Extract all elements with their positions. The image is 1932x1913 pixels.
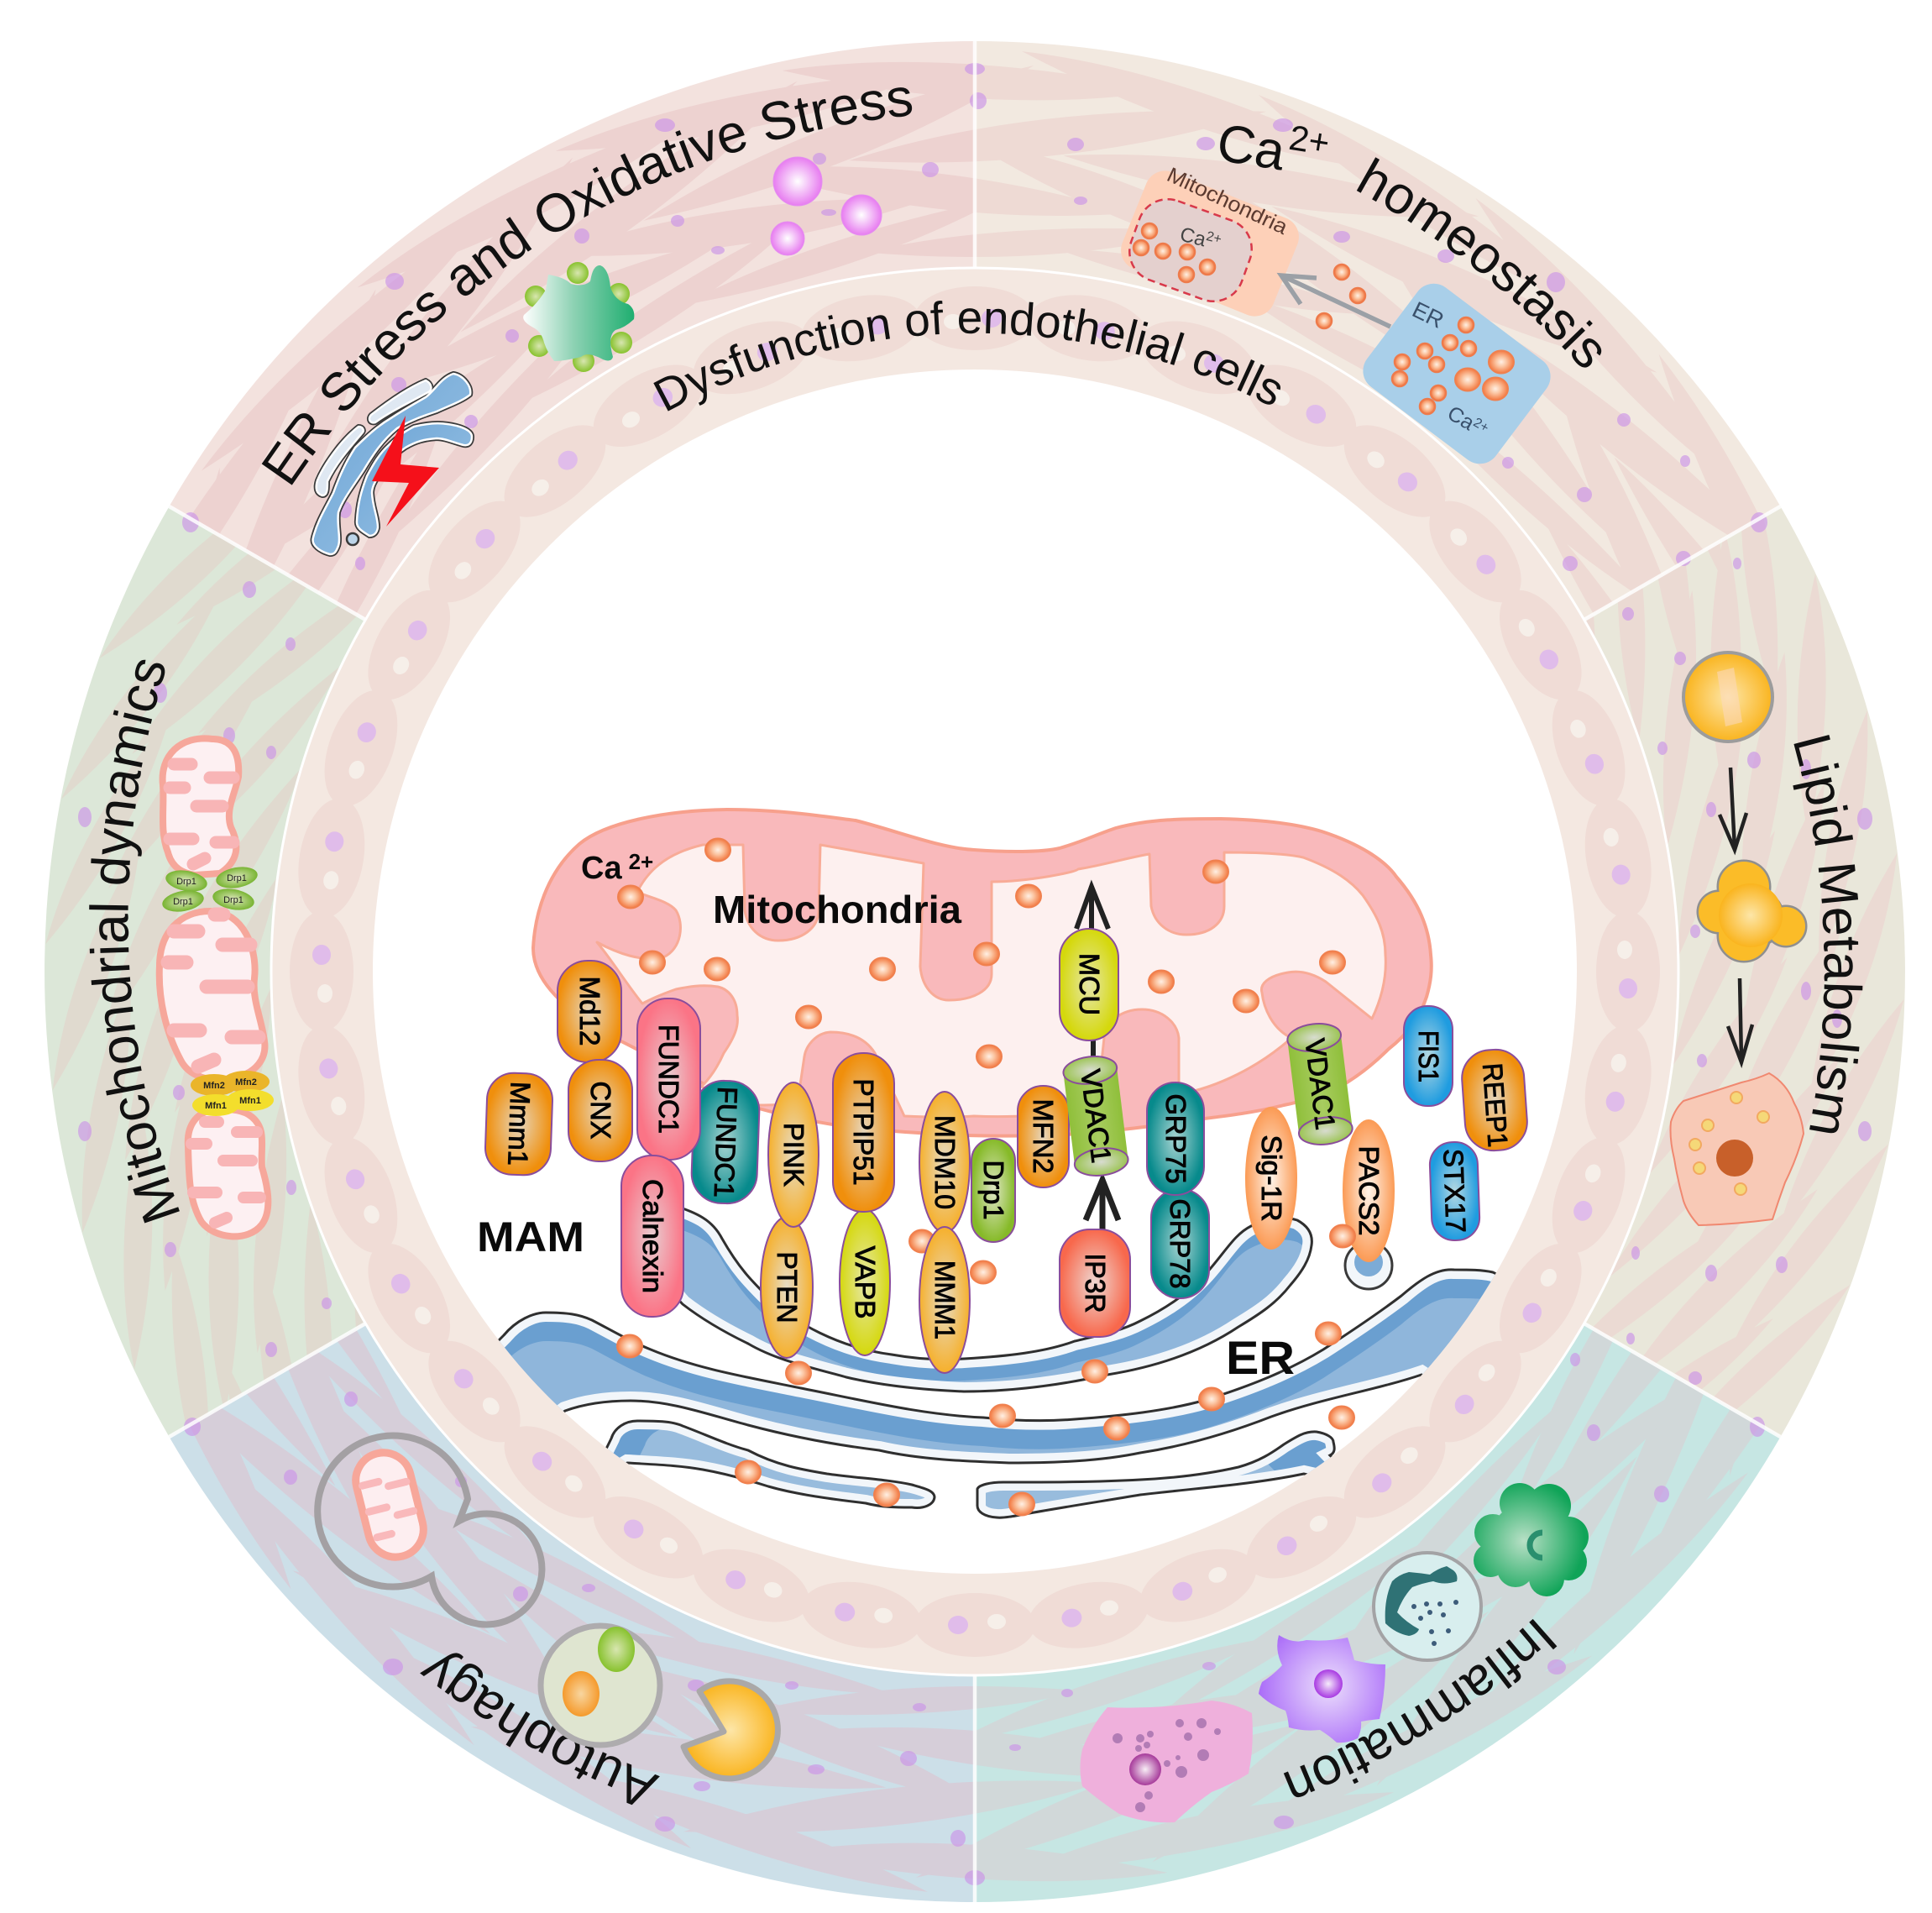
protein: Calnexin: Calnexin: [637, 1179, 668, 1293]
protein: REEP1: [1460, 1048, 1529, 1152]
icon: lipid cluster: [1699, 862, 1805, 961]
title: Dysfunction of endothelial cells: Dysfunction of endothelial cells: [653, 301, 1281, 411]
icon: ER calcium box: [1355, 275, 1558, 472]
protein: PTPIP51: PTPIP51: [848, 1078, 879, 1186]
label: ER: ER: [1408, 296, 1448, 333]
Drp1 proteins: Drp1: [223, 895, 243, 905]
label: Ca2+ in mitochondria: Ca: [1178, 223, 1208, 251]
protein: MCU: MCU: [1074, 953, 1105, 1015]
label: Ca2+ in mitochondria: 2+: [1205, 229, 1223, 247]
title: Ca2+: Ca: [1213, 113, 1289, 181]
title: Lipid Metabolism: Lipid Metabolism: [1793, 735, 1862, 1134]
central diagram: [470, 810, 1537, 1521]
segment: autophagy background: [170, 1325, 973, 1902]
protein: VDAC1 cylinder right: [1285, 1021, 1354, 1147]
label: Mitochondria: Mitochondria: [713, 888, 961, 931]
segment: calcium homeostasis background: [976, 41, 1780, 617]
Drp1 proteins: Drp1: [173, 897, 193, 907]
icon: pink oxidative spheres: [771, 157, 882, 255]
title: Autophagy: Autophagy: [420, 1653, 660, 1806]
protein: FIS1: FIS1: [1413, 1030, 1444, 1082]
label: Ca2+ in ER: 2+: [1471, 416, 1491, 436]
Mfn proteins: Mfn1: [205, 1101, 227, 1111]
protein: Md12: [558, 961, 621, 1062]
endoplasmic reticulum sheets: [470, 1206, 1537, 1521]
protein: Drp1: Drp1: [978, 1161, 1009, 1219]
mitochondrion: middle fragment: [160, 911, 264, 1079]
protein: PINK: PINK: [778, 1123, 809, 1187]
protein: Sig-1R: Sig-1R: [1256, 1135, 1287, 1221]
title: Inflammation: Inflammation: [1283, 1619, 1557, 1797]
icon: mitochondria calcium box: [1115, 163, 1305, 322]
protein: MMM1: MMM1: [929, 1260, 961, 1339]
vesicle at PACS2: [1345, 1242, 1392, 1289]
Drp1 proteins: Drp1: [227, 873, 247, 883]
protein: VDAC1 cylinder left: [1062, 1054, 1129, 1178]
icon: red lightning bolt: [372, 416, 439, 527]
Mfn proteins: Mfn1: [239, 1096, 261, 1106]
protein: PACS2: PACS2: [1353, 1145, 1385, 1236]
ball over PACS2 edge: [1330, 1224, 1355, 1248]
protein: VAPB: VAPB: [850, 1246, 881, 1318]
protein: FUNDC1 pink: FUNDC1: [653, 1025, 684, 1134]
segment: lipid metabolism background: [1586, 507, 1905, 1436]
icon: lysosome with two vesicles: [541, 1626, 660, 1745]
icon: round lipid droplet: [1683, 653, 1772, 742]
icon: lipid droplet sequence: [1671, 653, 1805, 1225]
protein: MFN2: [1018, 1086, 1069, 1187]
protein: CNX: [568, 1060, 632, 1161]
protein: GRP78: [1151, 1189, 1209, 1298]
protein: MCU: [1060, 929, 1118, 1040]
arrow: droplet to cluster: [1720, 768, 1746, 850]
protein: PTPIP51: [833, 1053, 894, 1212]
icon: pink granulated cell: [1080, 1701, 1253, 1822]
protein: Sig-1R: [1245, 1107, 1297, 1250]
mitochondrion: bottom fragment: [188, 1109, 268, 1236]
protein: GRP78: GRP78: [1165, 1199, 1196, 1288]
calcium balls between ER and mitochondria: [1317, 265, 1365, 328]
protein: FIS1: [1404, 1006, 1453, 1106]
protein: MFN2: MFN2: [1028, 1098, 1059, 1174]
Drp1 proteins: Drp1: [176, 877, 196, 887]
protein: STX17: STX17: [1437, 1148, 1472, 1234]
label: Ca 2+: Ca: [581, 851, 622, 886]
protein: Mmm1: [484, 1072, 553, 1176]
protein: PTEN: [761, 1217, 813, 1358]
protein: VDAC1 cylinder right: VDAC1: [1299, 1037, 1342, 1131]
protein: IP3R: IP3R: [1080, 1253, 1111, 1313]
calcium ions: [617, 838, 1354, 1515]
title: homeostasis: homeostasis: [1357, 157, 1602, 368]
protein: FUNDC1 teal: [690, 1080, 761, 1204]
protein: IP3R: [1060, 1229, 1130, 1337]
protein: FUNDC1 teal: FUNDC1: [709, 1086, 743, 1198]
inner ring: endothelial cells: [271, 268, 1678, 1675]
mitochondrion: top fragment: [163, 738, 238, 875]
protein: VAPB: [840, 1209, 890, 1355]
protein: Md12: Md12: [574, 976, 605, 1046]
Mfn proteins: [191, 1071, 274, 1116]
icon: small mitochondrion: [350, 1447, 429, 1563]
protein: FUNDC1 pink: [637, 998, 700, 1160]
label: ER: ER: [1226, 1331, 1295, 1384]
icon: green macrophage: [1474, 1483, 1589, 1596]
protein: Mmm1: Mmm1: [502, 1081, 537, 1166]
arrow: IP3R to VDAC1: [1086, 1180, 1118, 1234]
icon: purple cell: [1259, 1635, 1385, 1743]
icon: autophagosome with mitochondrion: [317, 1436, 542, 1624]
icon: grey arrow from ER to mitochondria: [1281, 275, 1390, 327]
arrow: cluster to foam cell: [1728, 978, 1752, 1062]
protein: REEP1: REEP1: [1477, 1062, 1514, 1148]
protein: MDM10: MDM10: [929, 1115, 961, 1209]
Mfn proteins: Mfn2: [235, 1077, 257, 1088]
title: ER Stress and Oxidative Stress: ER Stress and Oxidative Stress: [262, 87, 912, 485]
Mfn proteins: Mfn2: [203, 1081, 225, 1091]
label: MAM: MAM: [477, 1213, 584, 1260]
protein: PACS2: [1343, 1119, 1395, 1262]
protein: MMM1: [919, 1227, 970, 1373]
arrow: up into mitochondrion through MCU: [1076, 886, 1108, 1073]
protein: MDM10: [919, 1092, 970, 1233]
protein: VDAC1 cylinder left: VDAC1: [1075, 1067, 1118, 1165]
label: Ca 2+: 2+: [629, 849, 653, 874]
proteins: [484, 929, 1529, 1373]
protein: PTEN: PTEN: [772, 1251, 803, 1323]
title: Ca2+: 2+: [1286, 118, 1333, 163]
icon: dividing mitochondria: [160, 738, 274, 1236]
protein: Drp1: [971, 1139, 1015, 1242]
icon: green spiky cell: [523, 262, 634, 372]
segment: mitochondrial dynamics background: [45, 507, 364, 1436]
icon: neutrophil in circle: [1374, 1553, 1481, 1660]
icon: pac-man phagocyte: [683, 1681, 778, 1779]
protein: Calnexin: [621, 1156, 683, 1317]
title: Mitochondrial dynamics: Mitochondrial dynamics: [89, 660, 180, 1223]
Drp1 proteins: [160, 864, 259, 915]
mitochondrion: [533, 810, 1432, 1136]
protein: PINK: [768, 1082, 819, 1227]
label: Ca2+ in ER: Ca: [1443, 401, 1479, 435]
protein: CNX: CNX: [585, 1082, 616, 1139]
icon: stressed ER with lightning bolt: [313, 374, 472, 554]
segment: inflammation background: [975, 1324, 1780, 1902]
protein: STX17: [1429, 1141, 1480, 1241]
label: Mitochondria: Mitochondria: [1163, 163, 1291, 239]
protein: GRP75: [1147, 1082, 1204, 1195]
segment: ER stress background: [170, 41, 973, 617]
protein: GRP75: GRP75: [1160, 1093, 1191, 1184]
icon: foam cell: [1671, 1073, 1804, 1225]
